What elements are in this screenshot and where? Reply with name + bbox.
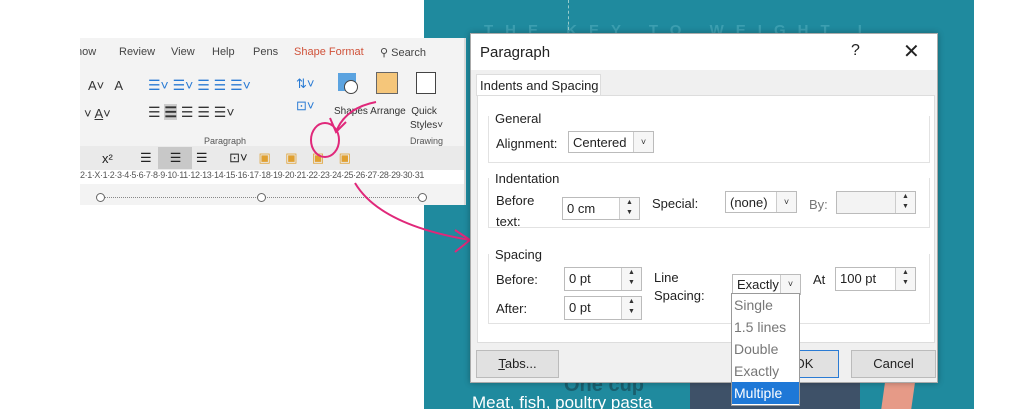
content panel: (none) <box>730 195 768 210</box>
content panel: text: <box>496 214 521 229</box>
spacing group <box>488 254 930 324</box>
ribbon tabs: View <box>171 46 195 58</box>
ribbon icons: Shapes Arrange Quick <box>334 106 437 117</box>
tab <box>476 74 601 96</box>
buttons: Tabs... <box>498 356 537 371</box>
bottom caption: Meat, fish, poultry pasta <box>472 393 652 412</box>
content panel: Line <box>654 270 679 285</box>
ribbon icons: ☰ ☰ ☰ ☰ ☰˅ <box>148 104 235 120</box>
ribbon icons: A˅ A <box>88 78 123 93</box>
ribbon icons: Styles˅ <box>410 120 443 131</box>
content panel: ▲ <box>628 298 635 305</box>
ruler: 2·1·X·1·2·3·4·5·6·7·8·9·10·11·12·13·14·15·16·17·18·19·20·21·22·23·24·25·26·27·28·29·30·31 <box>80 170 424 180</box>
content panel: 0 cm <box>567 201 595 216</box>
paragraph dialog <box>470 33 938 383</box>
content panel: After: <box>496 301 527 316</box>
ribbon screenshot <box>80 38 466 205</box>
ribbon icons: ⊡˅ <box>296 98 314 113</box>
ribbon icons: ⇅˅ <box>296 76 314 91</box>
subheading: One cup <box>564 374 644 396</box>
salmon stripe <box>881 370 917 409</box>
content panel: ▲ <box>902 193 909 200</box>
second toolbar: x² <box>102 151 113 166</box>
content panel: Alignment: <box>496 136 557 151</box>
ribbon icons: ☰˅ ☰˅ ☰ ☰ ☰˅ <box>148 77 251 93</box>
content panel: ▼ <box>902 279 909 286</box>
teal slide background <box>424 0 974 409</box>
content panel: By: <box>809 197 828 212</box>
second toolbar: ☰ ☰ ☰ ⊡˅ ▣ ▣ ▣ ▣ <box>140 150 351 165</box>
content panel: Spacing: <box>654 288 705 303</box>
dialog title bar <box>471 34 937 70</box>
general group <box>488 116 930 163</box>
ribbon icons <box>84 72 443 146</box>
second toolbar <box>80 146 466 170</box>
dropdown list <box>731 293 800 406</box>
ribbon tabs <box>80 46 426 59</box>
content panel: ▼ <box>628 308 635 315</box>
paragraph dialog: Cancel <box>873 356 914 371</box>
content panel: ▼ <box>902 203 909 210</box>
content panel: ▲ <box>626 199 633 206</box>
dropdown list: Exactly <box>734 363 779 379</box>
content panel: ▲ <box>628 269 635 276</box>
content panel: Exactly <box>737 277 779 292</box>
content panel: 0 pt <box>569 271 591 286</box>
dropdown list: Double <box>734 341 778 357</box>
content panel: ▲ <box>902 269 909 276</box>
content panel: 0 pt <box>569 300 591 315</box>
dialog title bar: Paragraph <box>480 44 550 61</box>
ribbon tabs: Help <box>212 46 235 58</box>
content panel: ▼ <box>628 279 635 286</box>
content panel: Spacing <box>495 247 542 262</box>
content panel: ˅ <box>784 197 789 207</box>
ribbon icons: Paragraph <box>204 136 246 146</box>
ribbon tabs: ⚲ Search <box>380 47 426 59</box>
content panel: ▼ <box>626 209 633 216</box>
faint title text: THE KEY TO WEIGHT L <box>484 22 879 39</box>
content panel: 100 pt <box>840 271 876 286</box>
ribbon tabs: Review <box>119 46 155 58</box>
buttons <box>476 350 559 378</box>
ruler <box>80 170 466 184</box>
content panel: ˅ <box>641 137 646 147</box>
paragraph dialog: OK <box>795 356 813 371</box>
content panel: ˅ <box>788 279 793 289</box>
content panel: Centered <box>573 135 626 150</box>
content panel: Special: <box>652 196 698 211</box>
dark panel <box>690 378 860 409</box>
indentation group <box>488 178 930 228</box>
content panel: General <box>495 111 541 126</box>
ribbon icons: ˅ A˅ <box>84 106 111 121</box>
content panel: Before <box>496 193 534 208</box>
tab: Indents and Spacing <box>480 78 599 93</box>
ribbon tabs: Pens <box>253 46 278 58</box>
content panel: Before: <box>496 272 538 287</box>
dropdown list: 1.5 lines <box>734 319 786 335</box>
dialog title bar: ✕ <box>903 41 920 63</box>
dropdown list: Single <box>734 297 773 313</box>
content panel <box>477 95 935 343</box>
content panel: Indentation <box>495 171 559 186</box>
dropdown list: Multiple <box>734 385 782 401</box>
ribbon tabs: Shape Format <box>294 46 364 58</box>
dialog title bar: ? <box>851 42 860 59</box>
content panel: At <box>813 272 825 287</box>
ribbon icons: Drawing <box>410 136 443 146</box>
